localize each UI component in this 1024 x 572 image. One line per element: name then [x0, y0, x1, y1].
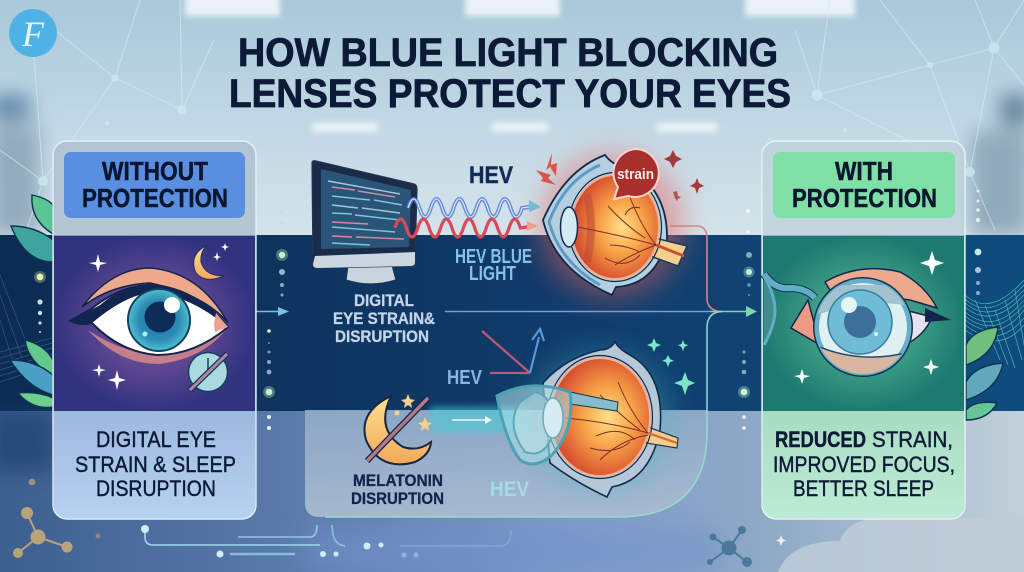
header chip [773, 152, 955, 218]
label: digital eye strain and disruption [333, 291, 435, 346]
header chip: WITHOUT [102, 156, 208, 186]
caption [75, 427, 236, 501]
label: HEV blue light: LIGHT [469, 263, 516, 285]
lower area [54, 411, 255, 518]
caption: BETTER SLEEP [793, 476, 934, 501]
title [229, 31, 791, 116]
icon: molecule left [13, 479, 100, 558]
header chip: PROTECTION [82, 183, 228, 213]
illustration background green [763, 236, 964, 411]
logo badge: F [21, 14, 45, 54]
illustration background purple [54, 236, 255, 411]
icon: protected eye cross-section with lens [497, 342, 678, 497]
icon: moon [194, 245, 224, 279]
connector: main flow arrows [256, 226, 757, 517]
panel: with protection [762, 141, 965, 519]
icon: sparkles [794, 251, 944, 384]
icon: open eye [70, 268, 228, 364]
icon: computer monitor [312, 161, 417, 284]
label: HEV blue light: HEV BLUE [455, 246, 532, 268]
icon: molecule right [707, 526, 752, 567]
header chip: PROTECTION [792, 183, 937, 213]
caption [773, 427, 955, 501]
label: melatonin disruption: MELATONIN [353, 471, 443, 490]
label: HEV lower: HEV [490, 478, 529, 501]
icon: strained eye cross-section [540, 153, 687, 297]
caption: IMPROVED FOCUS, [773, 452, 955, 477]
label: digital eye strain and disruption: DIGITAL [354, 291, 414, 310]
left leaves [10, 195, 53, 407]
header chip: WITH [835, 156, 893, 186]
panel: without protection [53, 141, 256, 519]
header chip [64, 152, 245, 218]
caption: STRAIN & SLEEP [75, 452, 236, 477]
caption: DIGITAL EYE [96, 427, 216, 452]
caption: REDUCED [775, 427, 866, 452]
lower area [763, 411, 964, 518]
callout: strain bubble [613, 149, 659, 199]
label: HEV blue light [455, 246, 532, 285]
panel: melatonin lower background [305, 410, 707, 517]
title: LENSES PROTECT YOUR EYES [229, 72, 791, 116]
title: HOW BLUE LIGHT BLOCKING [238, 31, 778, 75]
arrow: blue HEV wave [408, 199, 541, 217]
icon: green sparkles [647, 338, 695, 395]
mesh graphics at page edges [0, 275, 1024, 382]
circuit lines [141, 525, 511, 558]
light dots [34, 190, 981, 430]
label: HEV reflected: HEV [447, 367, 483, 389]
label: digital eye strain and disruption: EYE STRAIN& [333, 309, 435, 328]
icon: small white sparkle [776, 535, 786, 546]
caption: STRAIN, [872, 427, 953, 452]
panel border [762, 141, 965, 519]
icon: red sparkles and zaps [536, 150, 704, 201]
arrow: red light wave [395, 219, 538, 237]
label: digital eye strain and disruption: DISRUPTION [335, 327, 429, 346]
right leaves [966, 327, 1003, 420]
light beam [430, 406, 530, 433]
label: HEV: HEV [469, 162, 513, 189]
caption: DISRUPTION [96, 476, 216, 501]
icon: eye behind glasses [764, 269, 951, 380]
callout: strain bubble: strain [617, 166, 654, 183]
label: melatonin disruption: DISRUPTION [351, 489, 444, 508]
logo badge [9, 9, 57, 57]
decorative network lines [0, 0, 1024, 235]
icon: sparkles [89, 243, 229, 390]
arrow: reflected rays [482, 329, 544, 373]
icon: crossed-out moon [364, 394, 432, 464]
icon: crossed-out clock [188, 352, 228, 392]
label: melatonin disruption [351, 471, 444, 508]
panel border [53, 141, 256, 519]
